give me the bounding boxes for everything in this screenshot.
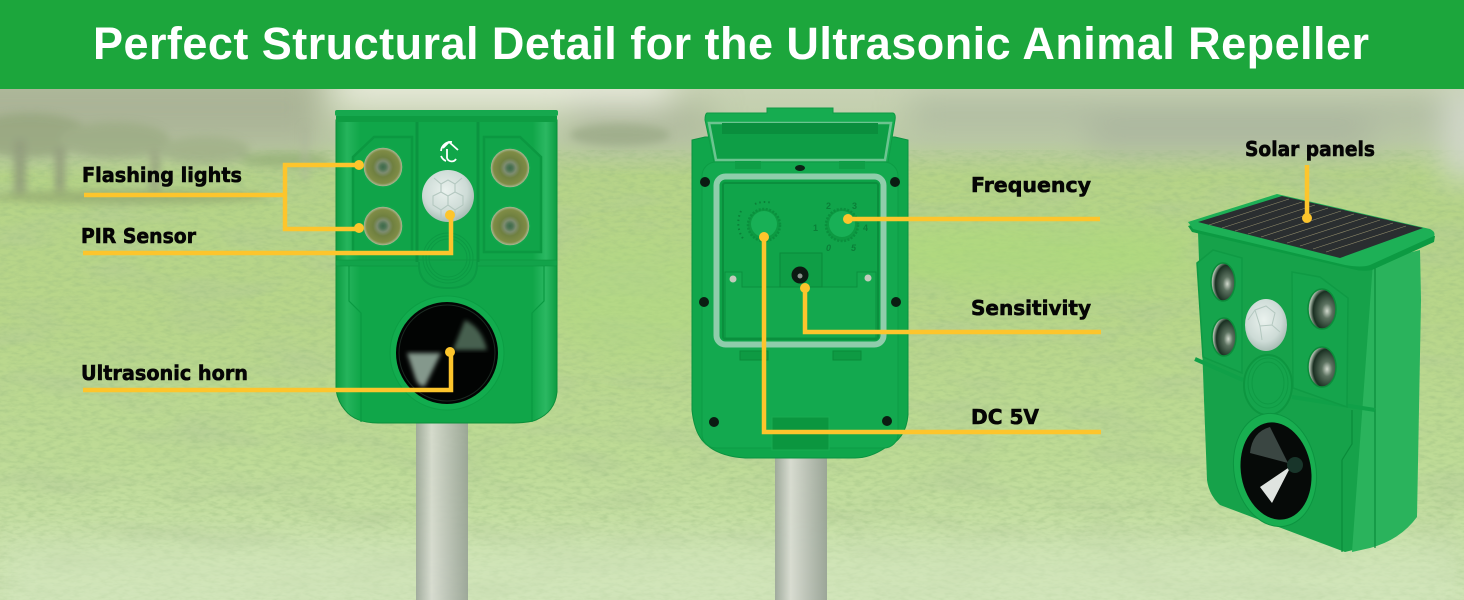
ultrasonic horn [390, 296, 504, 410]
DC 5V jack [780, 253, 822, 287]
frequency knob: 4 [863, 223, 868, 233]
callout: sensitivity: Sensitivity [971, 296, 1091, 320]
callout: PIR sensor: PIR Sensor [81, 224, 196, 248]
brand logo icon [441, 142, 458, 161]
pairing button, angled [1244, 355, 1292, 415]
callout: frequency [843, 173, 1100, 224]
right LED panel, angled [1292, 272, 1348, 407]
frequency knob [813, 201, 868, 253]
title: Perfect Structural Detail for the Ultrasonic Animal Repeller [93, 18, 1369, 69]
right LED panel [484, 137, 541, 252]
left LED panel [353, 137, 412, 252]
frequency knob: 3 [852, 201, 857, 211]
callout: ultrasonic horn [81, 347, 455, 390]
front pole [416, 420, 468, 600]
pole socket [772, 417, 829, 450]
device: back view with open lid [692, 108, 908, 458]
frequency knob: 5 [851, 243, 857, 253]
solar panel lid [1188, 194, 1435, 271]
PIR sensor dome, angled [1245, 299, 1287, 351]
callout: solar panels: Solar panels [1245, 137, 1375, 161]
left LED panel, angled [1197, 250, 1242, 373]
hinged lid [705, 108, 895, 171]
pairing button rings [419, 233, 477, 288]
frequency knob: 1 [813, 223, 818, 233]
frequency knob: 2 [826, 201, 831, 211]
ultrasonic horn, angled [1225, 407, 1325, 533]
PIR sensor dome [422, 170, 474, 222]
back pole [775, 445, 827, 600]
callout: DC 5V: DC 5V [971, 405, 1040, 429]
callout: ultrasonic horn: Ultrasonic horn [81, 361, 248, 385]
callout: DC 5V [759, 232, 1101, 432]
latches [740, 351, 861, 360]
screws [699, 177, 901, 427]
callout: flashing lights: Flashing lights [82, 163, 242, 187]
silicone gasket [716, 176, 884, 344]
device: angled view with solar panel [1188, 194, 1435, 552]
callout: frequency: Frequency [971, 173, 1091, 197]
device: front view [335, 110, 558, 423]
callout: flashing lights [82, 160, 364, 233]
sensitivity knob [738, 202, 780, 241]
battery cover [725, 272, 876, 338]
callout: PIR sensor [81, 210, 455, 253]
solar cells [1198, 196, 1423, 258]
frequency knob: 0 [826, 243, 831, 253]
title banner [0, 0, 1464, 89]
callout: solar panels [1245, 137, 1375, 223]
callout: sensitivity [800, 283, 1101, 332]
